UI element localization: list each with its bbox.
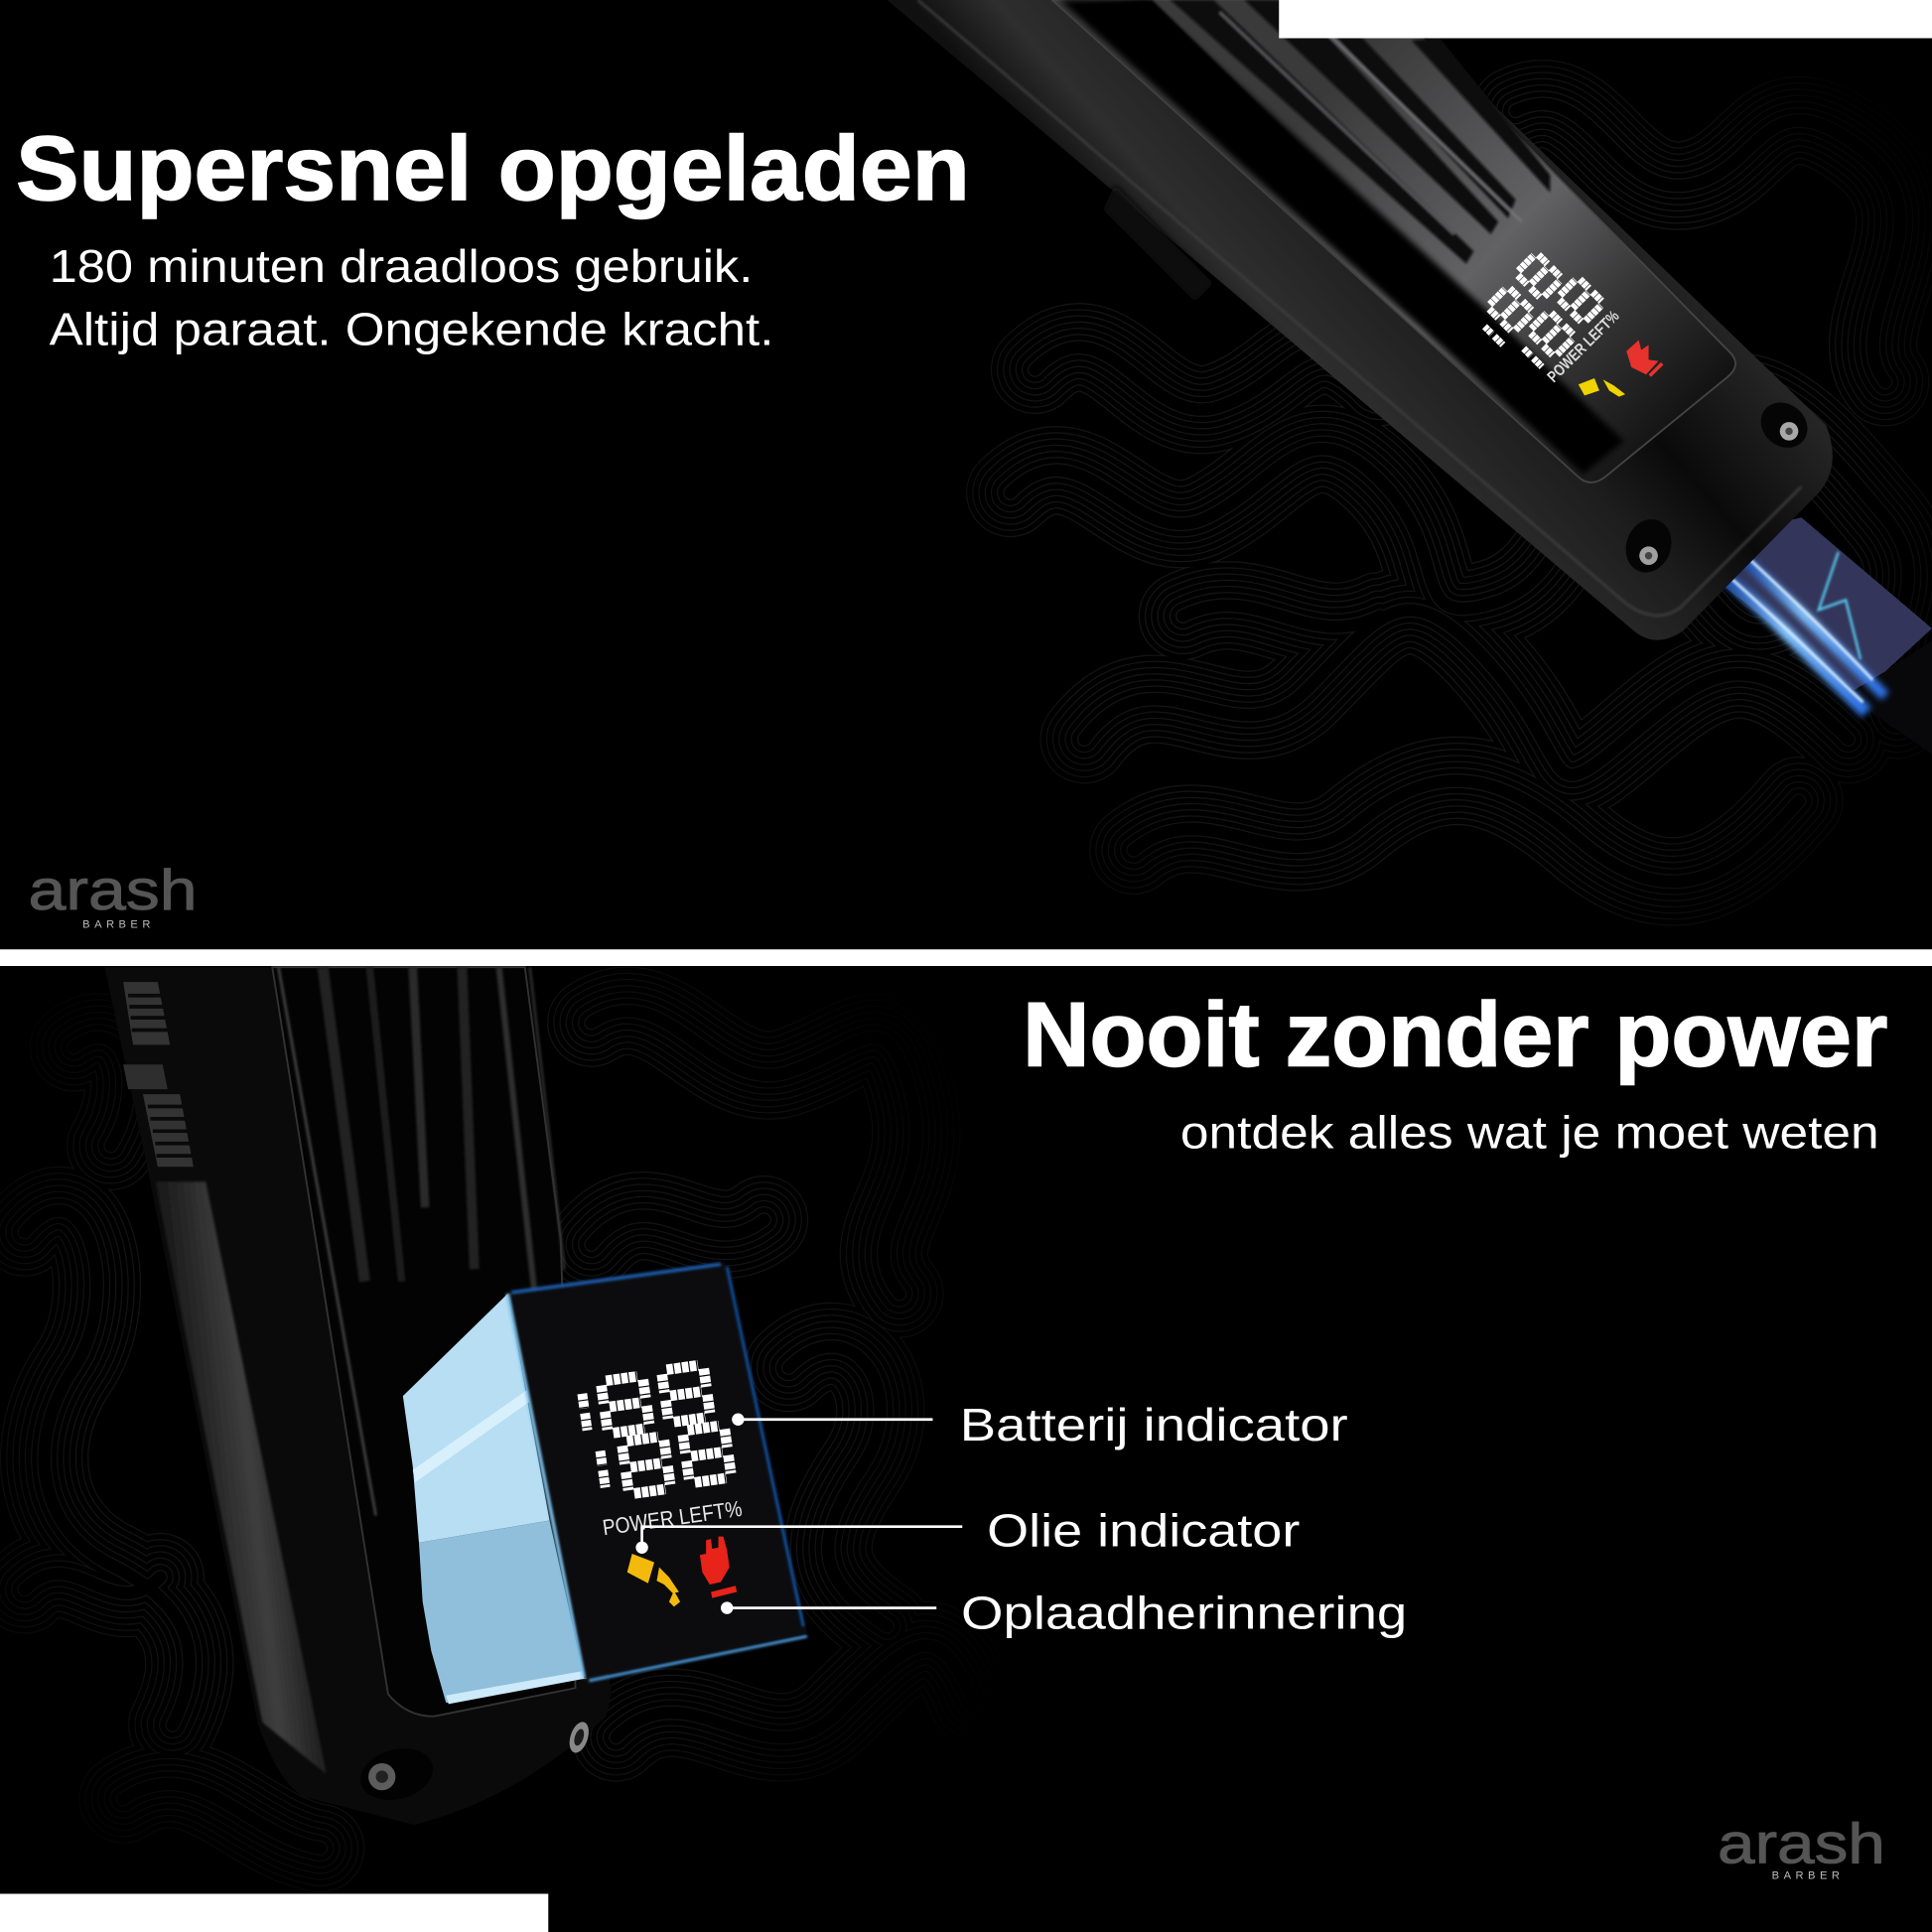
screw: right (566, 1720, 593, 1755)
callout line: charge reminder (721, 1601, 936, 1614)
trimmer photo: top panel (888, 0, 1932, 755)
grooves (278, 967, 564, 1516)
screen panel (1052, 0, 1735, 483)
display label: POWER LEFT% (601, 1496, 744, 1540)
title: top panel: Supersnel opgeladen (16, 118, 970, 219)
display label: POWER LEFT% (1544, 307, 1623, 386)
display digits (1473, 244, 1606, 376)
trimmer photo: bottom panel (104, 967, 612, 1825)
face glow edges (507, 1264, 807, 1681)
subtitle: bottom panel: ontdek alles wat je moet weten (1180, 1107, 1879, 1159)
callout line: oil indicator (635, 1527, 962, 1554)
blue side: dark part (419, 1520, 584, 1703)
screw: upper (1751, 393, 1817, 457)
dark grooves on the body (1074, 0, 1550, 305)
body edge highlights (918, 0, 1801, 616)
logo: bottom panel: arash (1718, 1813, 1885, 1876)
label: charge reminder: Oplaadherinnering (961, 1587, 1407, 1639)
label: oil indicator: Olie indicator (987, 1505, 1300, 1557)
blue side: highlight (413, 1390, 532, 1482)
magnified display callout (403, 1263, 807, 1704)
screw: lower (1618, 512, 1679, 579)
trimmer body (888, 0, 1833, 640)
logo: top panel: arash (29, 859, 198, 922)
text block: top panel (50, 240, 773, 355)
side buttons (123, 982, 194, 1167)
icon: oil (1579, 378, 1625, 397)
black face (507, 1263, 807, 1678)
screw: left (354, 1741, 439, 1808)
background pattern: top panel (1011, 104, 1908, 882)
text block: top panel: 180 minuten draadloos gebruik. (50, 240, 753, 292)
side strip (155, 1181, 327, 1774)
white corner block: bottom left (0, 1894, 548, 1932)
callout line: battery indicator (732, 1414, 932, 1426)
title: bottom panel: Nooit zonder power (1023, 985, 1887, 1086)
icon: charge plug (1626, 341, 1663, 377)
side switch (1103, 185, 1213, 302)
trimmer body (104, 967, 612, 1825)
label: battery indicator: Batterij indicator (960, 1399, 1348, 1450)
blue side: lower rim (446, 1671, 587, 1704)
text block: top panel: Altijd paraat. Ongekende kracht. (50, 303, 773, 354)
usb-c cable with blue glow (1716, 517, 1932, 755)
display digits (581, 1363, 732, 1499)
logo: bottom panel: BARBER (1772, 1870, 1840, 1882)
inner panel (272, 967, 576, 1717)
logo: top panel: BARBER (82, 919, 150, 931)
dark gloss on screen (1059, 0, 1624, 475)
white corner block: top right (1279, 0, 1932, 38)
blue side: light part (403, 1294, 550, 1543)
background pattern: bottom panel (25, 1011, 973, 1849)
icon: charge plug (700, 1537, 737, 1598)
white divider band (0, 949, 1932, 966)
icon: oil (627, 1554, 680, 1606)
